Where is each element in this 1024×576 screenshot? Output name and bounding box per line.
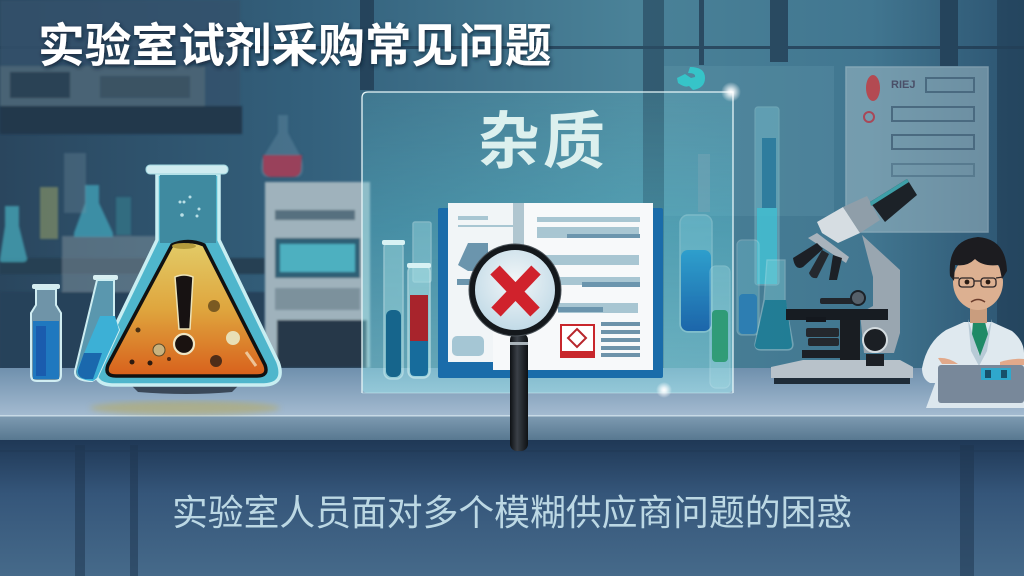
- icon: red hazard stamp: [561, 325, 594, 357]
- scientist figure: [922, 237, 1024, 383]
- benchtop instrument: [926, 365, 1024, 408]
- panel: glass card: [362, 82, 741, 398]
- test tubes: [382, 222, 431, 379]
- magnifying glass with red cross: [469, 244, 561, 451]
- counter: [0, 368, 1024, 576]
- blurred red flask: [261, 115, 303, 177]
- icon: red cross: [495, 270, 536, 312]
- title: 实验室试剂采购常见问题: [38, 20, 552, 72]
- background: lab wall: [0, 0, 1024, 380]
- wall clipboard: RIEJ: [891, 79, 915, 91]
- background test tubes and flasks: [680, 107, 793, 388]
- small blue flask: [75, 275, 119, 381]
- small blue vial: [31, 284, 61, 381]
- teal logo mark: [677, 67, 705, 90]
- flask with impurities and warning mark: [90, 165, 280, 415]
- caption: 实验室人员面对多个模糊供应商问题的困惑: [172, 493, 852, 533]
- heading: impurity: 杂质: [478, 108, 608, 177]
- open document book: [438, 203, 663, 378]
- icon: exclamation mark: [174, 275, 194, 354]
- lab machine: [265, 182, 370, 368]
- left shelves: [0, 0, 303, 368]
- wall clipboard: [846, 67, 988, 232]
- microscope: [771, 179, 917, 384]
